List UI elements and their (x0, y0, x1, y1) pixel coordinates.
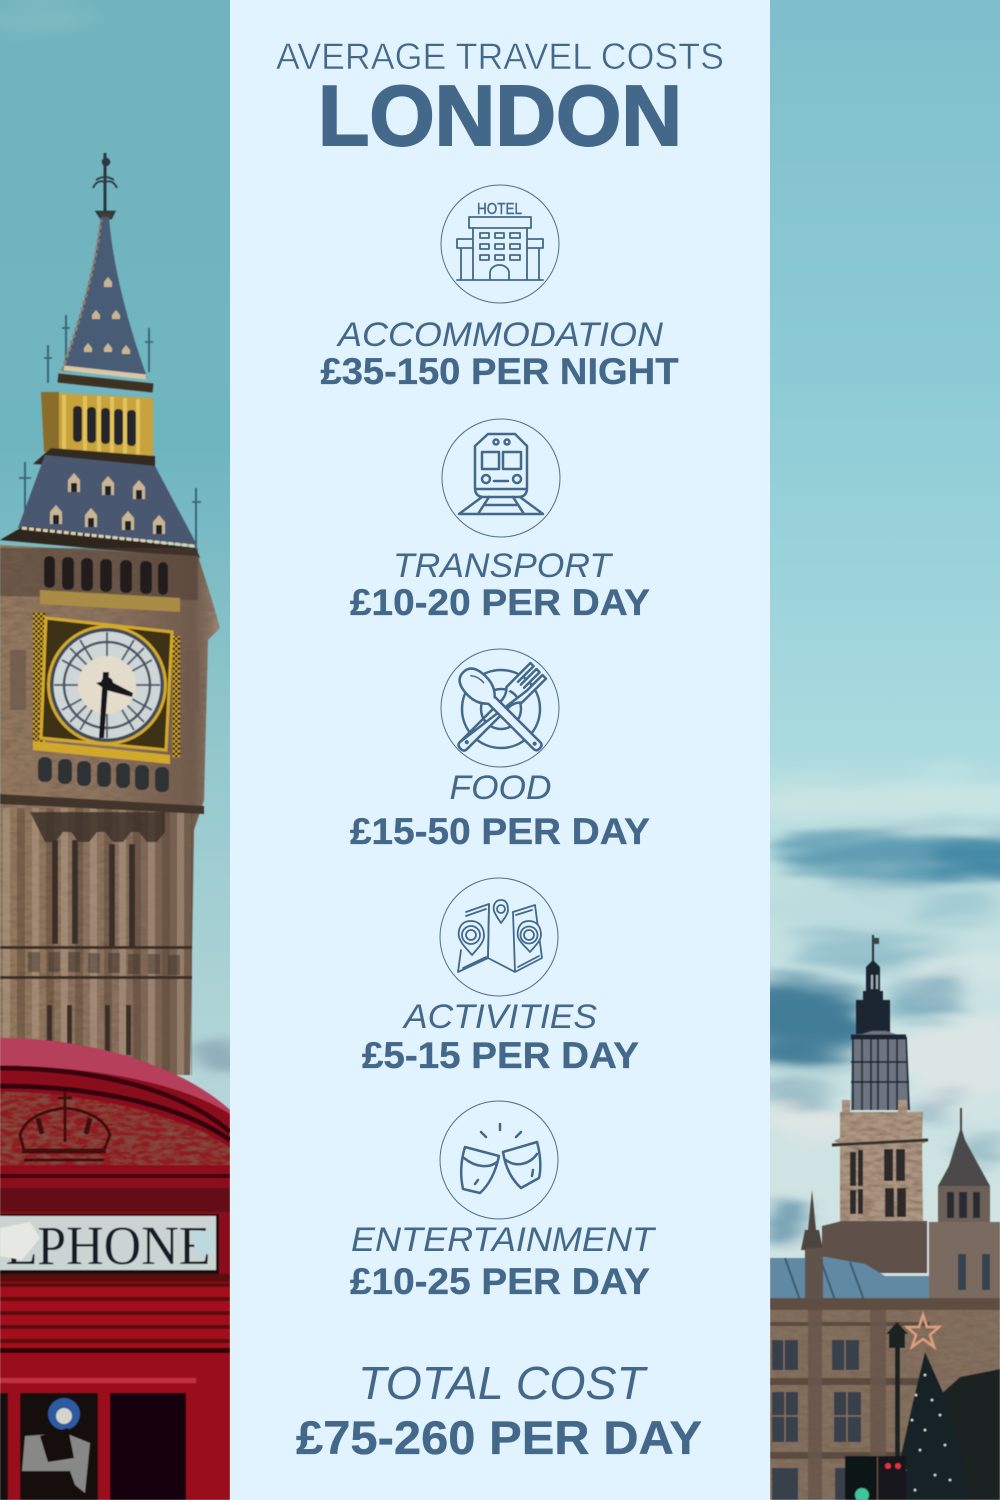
photo: Big Ben and red telephone box (0, 0, 244, 1500)
title: AVERAGE TRAVEL COSTS (276, 36, 724, 77)
golden belfry (41, 392, 153, 460)
panel: cost list (230, 0, 770, 1500)
dark tree (942, 1368, 1000, 1500)
cost: accommodation: £35-150 PER NIGHT (320, 351, 679, 392)
street lamp (886, 1322, 908, 1457)
cost: activities: £5-15 PER DAY (362, 1035, 639, 1076)
title: LONDON (318, 69, 682, 164)
tower stone body (0, 545, 220, 1075)
label: entertainment: ENTERTAINMENT (351, 1221, 656, 1259)
main spire (62, 217, 147, 377)
icon: hotel: HOTEL (477, 201, 522, 218)
cost: entertainment: £10-25 PER DAY (350, 1261, 650, 1302)
icon: map with pins (440, 878, 558, 996)
clock face and frame (33, 612, 180, 758)
christmas star (907, 1315, 939, 1347)
icon: train (442, 419, 560, 537)
gallery below the clock (38, 757, 169, 792)
photo: Westminster sky and gothic tower (770, 0, 1000, 1500)
telephone box top (0, 1038, 230, 1275)
icon: plate with spoon and fork (441, 649, 559, 767)
label: total cost: TOTAL COST (358, 1357, 648, 1409)
telephone sign: EPHONE (6, 1215, 210, 1276)
traffic lights (845, 1456, 906, 1500)
label: activities: ACTIVITIES (402, 998, 597, 1036)
right turret (938, 1107, 990, 1187)
crown emblem (20, 1092, 110, 1160)
cost: food: £15-50 PER DAY (350, 811, 650, 852)
telephone box windows (0, 1393, 186, 1500)
icon: clinking glasses (440, 1101, 558, 1219)
middle block and roof (822, 1221, 927, 1273)
cost: transport: £10-20 PER DAY (350, 582, 650, 623)
clock panels (10, 650, 26, 710)
lower roof (18, 455, 197, 545)
title (276, 36, 724, 164)
flag and turret top (872, 935, 874, 967)
icon: hotel (441, 185, 559, 303)
label: food: FOOD (450, 769, 552, 807)
cost: total: £75-260 PER DAY (296, 1411, 702, 1464)
right tower mid section (929, 1222, 1000, 1306)
facade (770, 1298, 1000, 1500)
label: transport: TRANSPORT (393, 547, 613, 585)
spire finial and pinnacles (19, 153, 201, 548)
stone tower (834, 1100, 928, 1224)
label: accommodation: ACCOMMODATION (336, 316, 663, 354)
glass lantern (851, 1031, 910, 1110)
